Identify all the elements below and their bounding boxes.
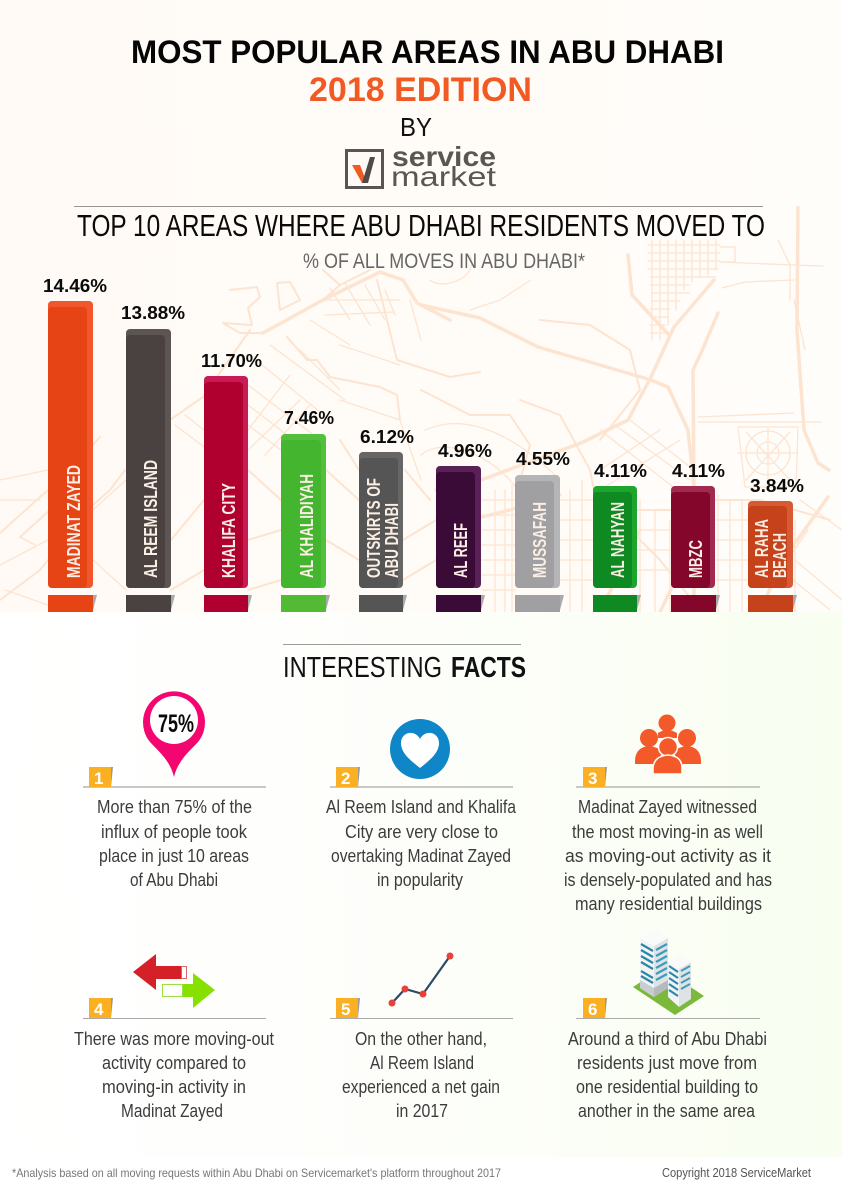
fact 2 text xyxy=(326,797,517,890)
fact 3 text: many residential buildings xyxy=(575,894,762,914)
bar: Al Nahyan: AL NAHYAN xyxy=(607,502,628,578)
bar: Al Reef xyxy=(436,441,492,612)
bar: Madinat Zayed: 14.46% xyxy=(43,276,107,296)
bar: Al Raha Beach xyxy=(748,476,804,612)
fact 5 text: experienced a net gain xyxy=(342,1077,500,1097)
fact 5 text: On the other hand, xyxy=(355,1029,487,1049)
bar: Al Raha Beach: AL RAHA xyxy=(751,519,772,578)
bar: Al Reef: AL REEF xyxy=(450,523,471,578)
fact 3 text: the most moving-in as well xyxy=(572,822,763,842)
fact 1 xyxy=(83,691,266,890)
fact 4 text: Madinat Zayed xyxy=(121,1101,223,1121)
fact 4 text: There was more moving-out xyxy=(74,1029,274,1049)
title: MOST POPULAR AREAS IN ABU DHABI xyxy=(131,34,724,70)
fact 5 text: in 2017 xyxy=(396,1101,448,1121)
icon: red and green arrows xyxy=(133,954,215,1008)
fact 2 text: overtaking Madinat Zayed xyxy=(331,846,511,866)
fact 3 text: as moving-out activity as it xyxy=(565,846,771,866)
interesting facts heading: INTERESTING xyxy=(283,652,442,684)
bar: MBZC: MBZC xyxy=(685,540,706,578)
fact 2 xyxy=(326,719,517,890)
bar: Al Raha Beach: BEACH xyxy=(769,533,790,578)
badge 4 xyxy=(89,998,113,1019)
chart subtitle: % OF ALL MOVES IN ABU DHABI* xyxy=(303,250,585,273)
fact 3 text xyxy=(564,797,772,914)
bar: Al Khalidiyah xyxy=(281,408,334,612)
title: 2018 EDITION xyxy=(309,71,532,109)
bar: Outskirts of Abu Dhabi: ABU DHABI xyxy=(381,503,402,578)
fact 5 text xyxy=(342,1029,500,1121)
bar: Mussafah: 4.55% xyxy=(516,449,570,469)
bar: Al Nahyan xyxy=(593,461,647,612)
icon: map pin 75%: 75% xyxy=(158,710,194,738)
badge 4: 4 xyxy=(94,1000,104,1019)
bar: Mussafah xyxy=(515,449,570,612)
bar: Khalifa City: 11.70% xyxy=(201,351,262,371)
bar: Al Reem Island: AL REEM ISLAND xyxy=(140,460,161,578)
fact 2 text: in popularity xyxy=(377,870,463,890)
bar chart xyxy=(43,276,804,612)
badge 6: 6 xyxy=(588,1000,597,1019)
icon: line chart xyxy=(388,952,454,1006)
bar: Madinat Zayed xyxy=(43,276,107,612)
fact 6 text: Around a third of Abu Dhabi xyxy=(568,1029,767,1049)
logo: servicemarket: market xyxy=(391,161,496,192)
badge 6 xyxy=(583,998,607,1019)
bar: Al Reem Island: 13.88% xyxy=(121,303,185,323)
copyright: Copyright 2018 ServiceMarket xyxy=(662,1165,811,1180)
fact 1 text xyxy=(97,797,252,890)
badge 2: 2 xyxy=(341,769,350,788)
fact 4 text: moving-in activity in xyxy=(102,1077,246,1097)
fact 6 xyxy=(568,930,767,1121)
fact 3 xyxy=(564,714,772,914)
interesting facts heading xyxy=(283,644,526,684)
icon: heart xyxy=(390,719,450,779)
bar: Khalifa City xyxy=(201,351,262,612)
fact 2 text: City are very close to xyxy=(345,822,498,842)
icon: map pin 75% xyxy=(143,691,205,777)
fact 2 text: Al Reem Island and Khalifa xyxy=(326,797,517,817)
bar: MBZC xyxy=(671,461,725,612)
fact 1 text: influx of people took xyxy=(101,822,248,842)
fact 3 text: is densely-populated and has xyxy=(564,870,772,890)
fact 1 text: More than 75% of the xyxy=(97,797,252,817)
logo: servicemarket: service xyxy=(392,141,496,172)
bar: Al Reem Island xyxy=(121,303,185,612)
icon: group of people xyxy=(635,714,701,774)
bar: Outskirts of Abu Dhabi: OUTSKIRTS OF xyxy=(363,478,384,578)
fact 5 text: Al Reem Island xyxy=(370,1053,474,1073)
badge 3 xyxy=(583,767,607,788)
badge 1: 1 xyxy=(94,769,103,788)
fact 6 text: residents just move from xyxy=(577,1053,757,1073)
bar: Al Reef: 4.96% xyxy=(438,441,492,461)
title: BY xyxy=(400,114,432,142)
fact 4 xyxy=(74,954,274,1121)
footnote: *Analysis based on all moving requests within Abu Dhabi on Servicemarket's platform throughout 2017 xyxy=(12,1166,501,1180)
bar: Khalifa City: KHALIFA CITY xyxy=(218,483,239,578)
fact 6 text: another in the same area xyxy=(578,1101,756,1121)
bar: Al Khalidiyah: 7.46% xyxy=(284,408,334,428)
background map of Abu Dhabi xyxy=(0,206,842,612)
fact 1 text: place in just 10 areas xyxy=(99,846,249,866)
badge 3: 3 xyxy=(588,769,597,788)
badge 2 xyxy=(336,767,360,788)
title xyxy=(131,34,724,142)
icon: buildings xyxy=(633,930,704,1015)
fact 6 text xyxy=(568,1029,767,1121)
interesting facts heading: FACTS xyxy=(451,652,526,684)
fact 6 text: one residential building to xyxy=(576,1077,758,1097)
bar: Al Nahyan: 4.11% xyxy=(594,461,647,481)
badge 1 xyxy=(89,767,113,788)
fact 5 xyxy=(330,952,513,1121)
fact 3 text: Madinat Zayed witnessed xyxy=(578,797,757,817)
bar: MBZC: 4.11% xyxy=(672,461,725,481)
badge 5: 5 xyxy=(341,1000,350,1019)
fact 1 text: of Abu Dhabi xyxy=(130,870,218,890)
logo: servicemarket xyxy=(346,141,496,192)
bar: Madinat Zayed: MADINAT ZAYED xyxy=(63,465,84,578)
bar: Al Raha Beach: 3.84% xyxy=(750,476,804,496)
badge 5 xyxy=(336,998,360,1019)
fact 4 text xyxy=(74,1029,274,1121)
bar: Outskirts of Abu Dhabi: 6.12% xyxy=(360,427,414,447)
fact 4 text: activity compared to xyxy=(102,1053,246,1073)
bar: Al Khalidiyah: AL KHALIDIYAH xyxy=(296,474,317,578)
bar: Mussafah: MUSSAFAH xyxy=(529,502,550,578)
bar: Outskirts of Abu Dhabi xyxy=(359,427,414,612)
